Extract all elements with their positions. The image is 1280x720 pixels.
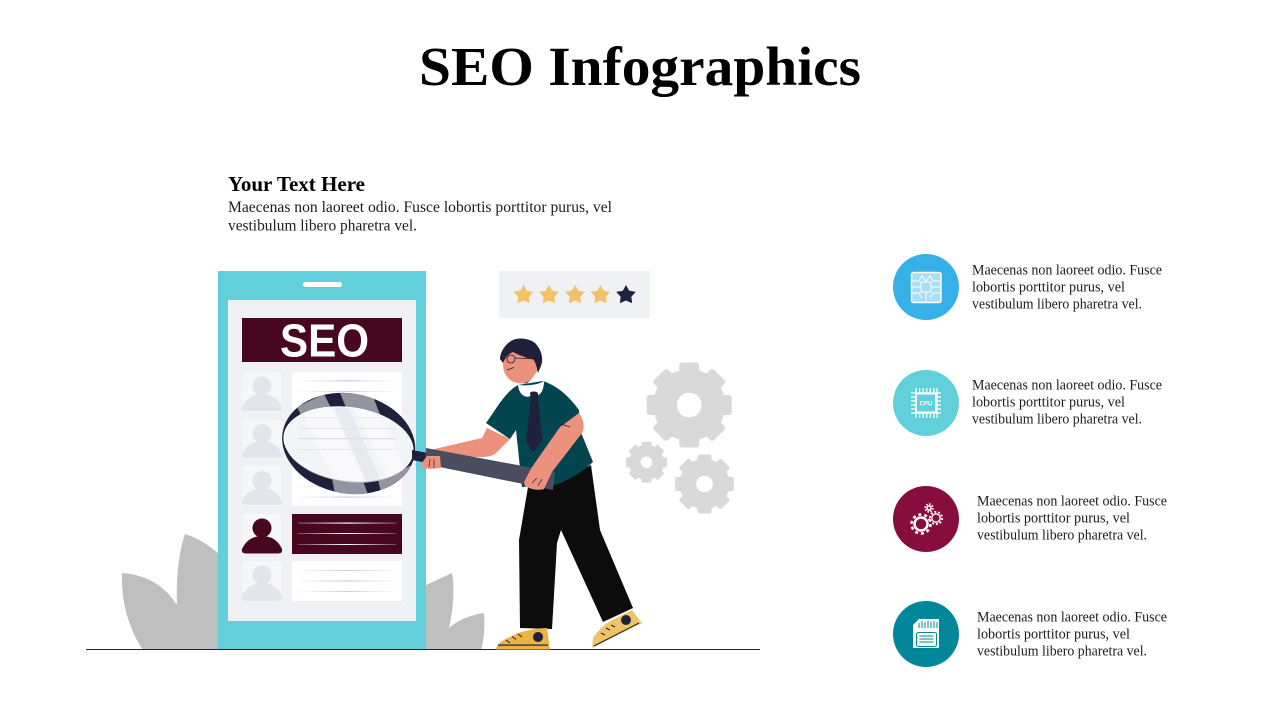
front arm: [524, 413, 584, 490]
item 4 text: vestibulum libero pharetra vel.: [977, 644, 1147, 660]
item 2: [893, 370, 1162, 436]
seo banner: [242, 314, 402, 366]
item 3 text: Maecenas non laoreet odio. Fusce: [977, 494, 1167, 510]
icon: cpu: [893, 370, 959, 436]
magnifier handle: [425, 448, 555, 490]
trousers: [519, 465, 633, 629]
icon: cpu: CPU: [920, 402, 932, 408]
seo banner: SEO: [280, 314, 369, 366]
item 4 text: lobortis porttitor purus, vel: [977, 626, 1130, 642]
right shoe: [592, 610, 642, 648]
highlighted result: [242, 514, 402, 554]
neck shade: [521, 377, 531, 383]
leaves right: [424, 573, 484, 650]
shirt: [486, 381, 593, 487]
leaves left: [122, 534, 220, 650]
back arm: [430, 428, 510, 457]
left shoe: [496, 628, 550, 650]
item 3: [893, 486, 1167, 552]
item 3 text: [977, 494, 1167, 544]
gears: [626, 362, 734, 514]
rating panel: [499, 271, 650, 318]
person: [421, 339, 642, 650]
medium gear: [675, 454, 734, 514]
tie: [526, 392, 542, 452]
result list: [242, 372, 402, 601]
icon: memory card: [893, 601, 959, 667]
title: SEO Infographics: [419, 36, 861, 97]
ground line: [86, 649, 760, 650]
item 1 text: lobortis porttitor purus, vel: [972, 280, 1125, 296]
item 3 text: vestibulum libero pharetra vel.: [977, 528, 1147, 544]
icon: sim chip: [893, 254, 959, 320]
magnifying glass head: [282, 392, 426, 494]
text block: your text here: [228, 172, 613, 234]
description: vestibulum libero pharetra vel.: [228, 218, 417, 234]
glasses: [507, 355, 537, 370]
item 2 text: lobortis porttitor purus, vel: [972, 394, 1125, 410]
face: [503, 351, 538, 383]
item 3 text: lobortis porttitor purus, vel: [977, 510, 1130, 526]
phone: [218, 271, 426, 650]
item 1 text: vestibulum libero pharetra vel.: [972, 296, 1142, 312]
collar: [518, 381, 544, 397]
icon: gears: [893, 486, 959, 552]
item 4 text: [977, 610, 1167, 660]
hair: [500, 339, 542, 373]
item 1: [893, 254, 1162, 320]
connector: [412, 450, 428, 463]
item 2 text: vestibulum libero pharetra vel.: [972, 412, 1142, 428]
stars: [514, 285, 636, 303]
item 1 text: [972, 262, 1162, 312]
screen: [228, 300, 416, 621]
description: [228, 199, 613, 234]
rear hand: [421, 456, 441, 469]
item 4: [893, 601, 1167, 667]
large gear: [647, 362, 732, 448]
item 4 text: Maecenas non laoreet odio. Fusce: [977, 610, 1167, 626]
item 2 text: Maecenas non laoreet odio. Fusce: [972, 378, 1162, 394]
description: Maecenas non laoreet odio. Fusce lobortis porttitor purus, vel: [228, 199, 613, 216]
item 2 text: [972, 378, 1162, 428]
small gear: [626, 442, 667, 483]
illustration: seo search scene: [86, 271, 760, 650]
item 1 text: Maecenas non laoreet odio. Fusce: [972, 262, 1162, 278]
subheading: Your Text Here: [228, 172, 365, 196]
lens: [283, 406, 414, 483]
